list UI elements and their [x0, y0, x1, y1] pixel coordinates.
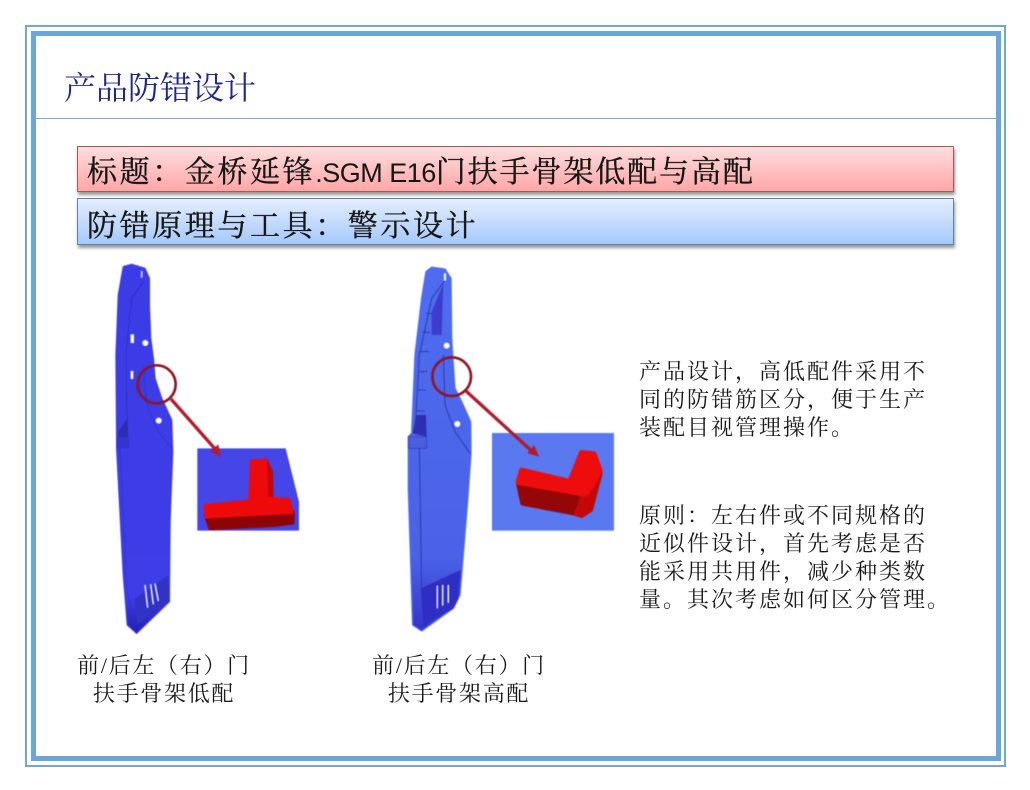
title rule — [35, 118, 996, 119]
text: principle — [639, 503, 951, 612]
text: product design: 装配目视管理操作。 — [639, 415, 855, 440]
part body — [408, 267, 471, 631]
banner: principle — [77, 198, 954, 245]
caption: high-spec: 前/后左（右）门 — [372, 653, 546, 678]
callout circle and arrow — [138, 365, 221, 457]
text: product design: 产品设计，高低配件采用不 — [639, 359, 927, 384]
text: product design: 同的防错筋区分，便于生产 — [639, 387, 927, 412]
caption: high-spec — [372, 653, 546, 706]
part body — [116, 264, 173, 633]
banner: title — [77, 146, 954, 192]
inset: T-shaped rib — [197, 448, 299, 531]
text: principle: 近似件设计，首先考虑是否 — [639, 531, 927, 556]
caption: low-spec: 前/后左（右）门 — [77, 653, 251, 678]
text: product design — [639, 359, 927, 440]
caption: high-spec: 扶手骨架高配 — [388, 681, 530, 706]
inset: L-shaped rib — [492, 433, 614, 531]
caption: low-spec: 扶手骨架低配 — [93, 681, 235, 706]
text: principle: 原则：左右件或不同规格的 — [639, 503, 927, 528]
text: principle: 能采用共用件，减少种类数 — [639, 559, 927, 584]
text: principle: 量。其次考虑如何区分管理。 — [639, 587, 951, 612]
caption: low-spec — [77, 653, 251, 706]
title: 产品防错设计 — [64, 70, 256, 106]
callout circle and arrow — [432, 357, 539, 457]
diagram: low-spec part — [114, 263, 300, 635]
banner principle text: 防错原理与工具：警示设计 — [87, 210, 478, 243]
banner title text: 标题：金桥延锋.SGM E16门扶手骨架低配与高配 — [87, 156, 755, 189]
diagram: high-spec part — [406, 266, 615, 632]
